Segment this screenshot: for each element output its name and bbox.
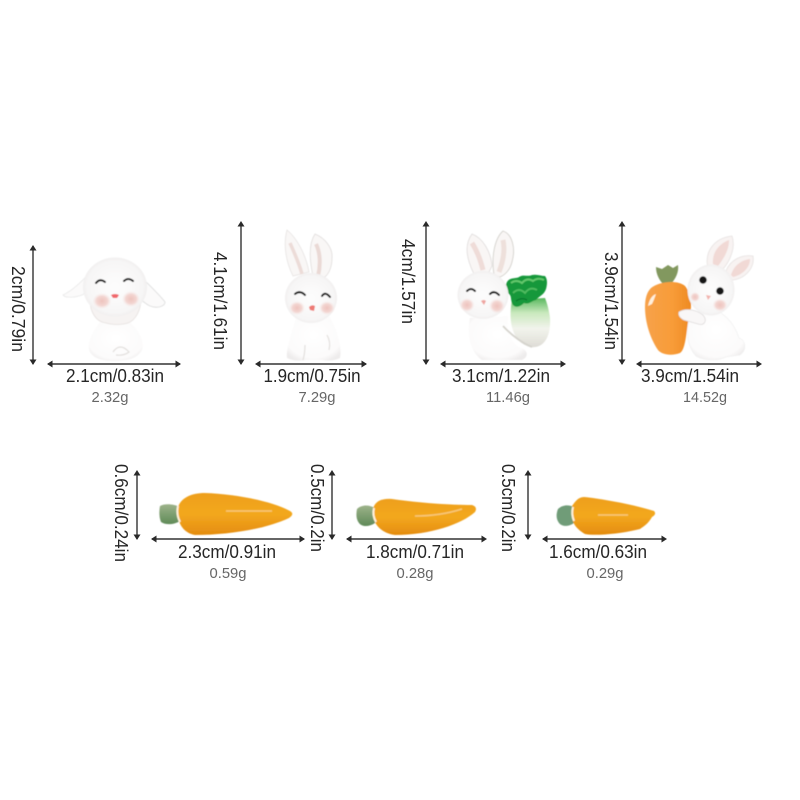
panel: tall-eared rabbit — [210, 221, 367, 406]
arrow: height — [524, 470, 532, 540]
label: weight: 11.46g — [486, 389, 530, 406]
panel: long carrot — [111, 464, 305, 582]
label: height: 0.5cm/0.2in — [498, 464, 518, 552]
label: weight: 0.28g — [396, 565, 434, 582]
icon: cabbage leaves — [506, 275, 547, 307]
label: weight: 7.29g — [298, 389, 336, 406]
arrow: width — [346, 536, 487, 542]
panel: rabbit with cabbage — [398, 221, 566, 406]
label: weight: 14.52g — [683, 389, 727, 406]
icon: floppy-eared rabbit figure — [63, 258, 165, 361]
arrow: width — [440, 360, 566, 368]
label: width: 1.6cm/0.63in — [549, 542, 647, 562]
arrow: height — [134, 470, 140, 540]
arrow: height — [422, 221, 430, 365]
label: height: 3.9cm/1.54in — [601, 252, 621, 350]
arrow: height — [30, 245, 36, 365]
label: weight: 0.59g — [210, 565, 246, 582]
label: height: 2cm/0.79in — [8, 266, 28, 352]
panel: rabbit hugging carrot — [601, 221, 762, 406]
label: height: 4.1cm/1.61in — [210, 252, 230, 350]
icon: slim carrot — [356, 499, 476, 535]
arrow: height — [618, 221, 626, 365]
panel: slim carrot — [307, 464, 487, 582]
label: width: 1.9cm/0.75in — [264, 366, 360, 386]
label: weight: 2.32g — [92, 389, 128, 406]
icon: tall-eared rabbit figure — [285, 230, 341, 361]
arrow: width — [151, 536, 305, 542]
icon: rabbit hugging large carrot — [645, 236, 753, 360]
arrow: width — [47, 360, 181, 368]
icon: long carrot — [159, 493, 292, 535]
label: height: 0.5cm/0.2in — [307, 464, 327, 552]
arrow: width — [255, 360, 367, 368]
arrow: height — [328, 470, 336, 540]
arrow: height — [238, 221, 244, 365]
label: weight: 0.29g — [586, 565, 624, 582]
arrow: width — [542, 536, 667, 542]
arrow: width — [636, 360, 762, 368]
icon: rabbit carrying cabbage — [458, 231, 550, 360]
label: height: 0.6cm/0.24in — [111, 464, 131, 562]
label: height: 4cm/1.57in — [398, 239, 418, 324]
panel: floppy-eared rabbit — [8, 245, 181, 406]
label: width: 2.1cm/0.83in — [66, 366, 164, 386]
label: width: 2.3cm/0.91in — [178, 542, 276, 562]
icon: short carrot — [557, 497, 655, 535]
label: width: 3.9cm/1.54in — [641, 366, 739, 386]
panel: short carrot — [498, 464, 667, 582]
label: width: 1.8cm/0.71in — [366, 542, 464, 562]
label: width: 3.1cm/1.22in — [452, 366, 550, 386]
